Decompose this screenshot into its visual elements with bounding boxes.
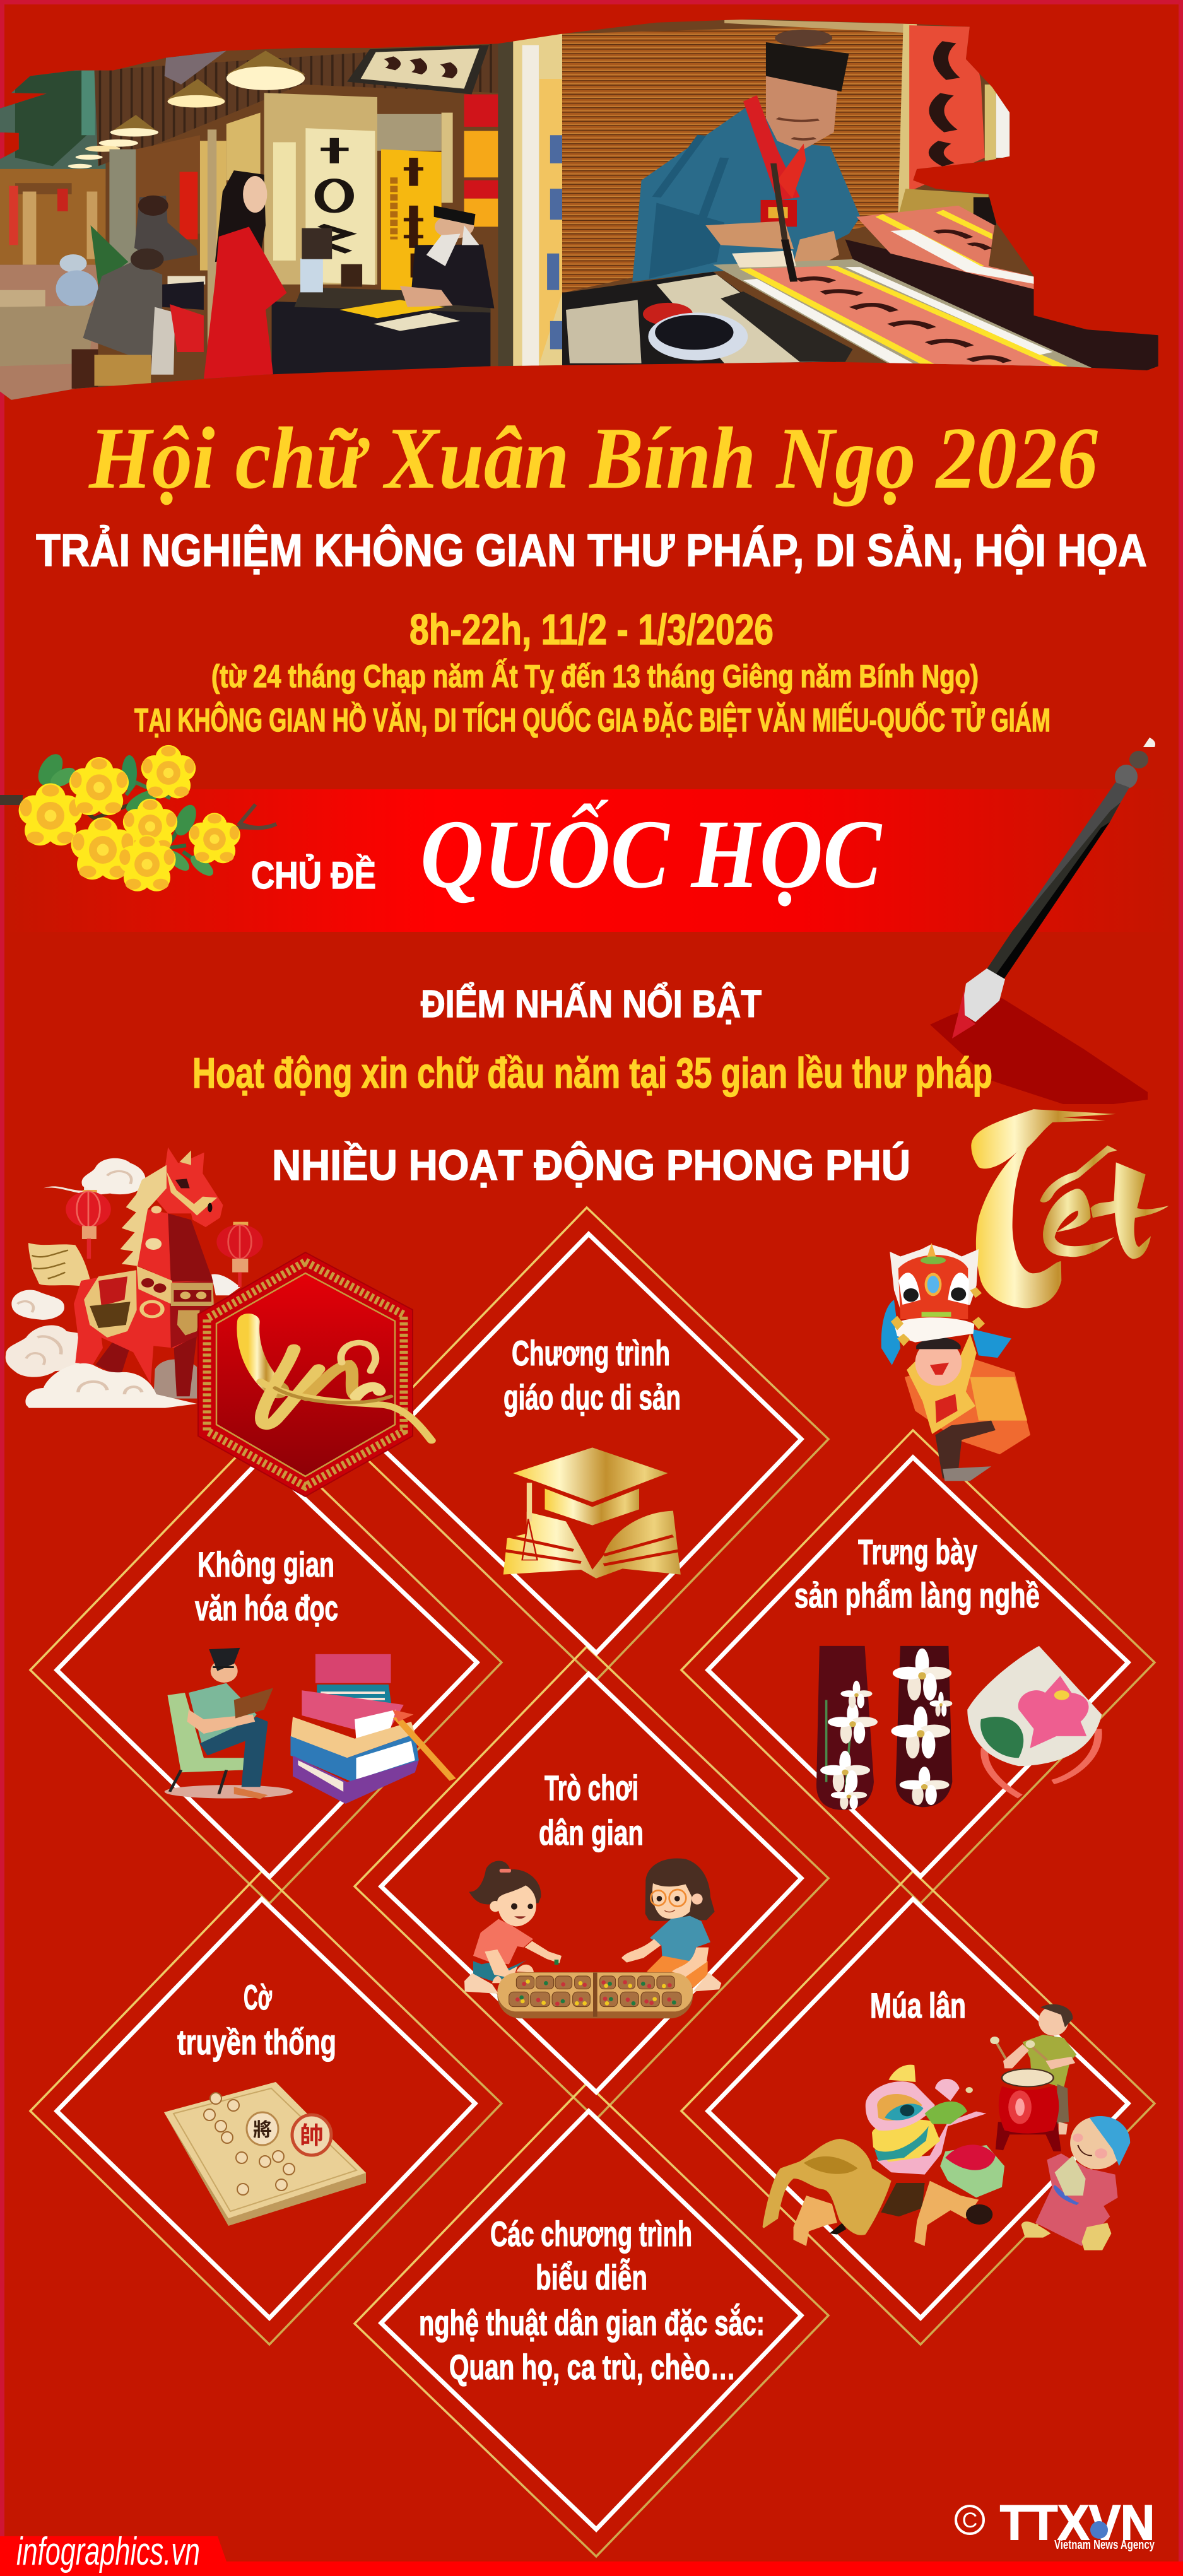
text: folk games: Trò chơi (544, 1768, 639, 1808)
lunar dates: (từ 24 tháng Chạp năm Ất Tỵ đến 13 tháng Giêng năm Bính Ngọ) (211, 659, 979, 694)
icon: xiangqi board (164, 2082, 366, 2226)
text: folk games: dân gian (539, 1813, 644, 1852)
text: folk art performances: Quan họ, ca trù, chèo… (449, 2347, 736, 2387)
copyright logo TTXVN: C (962, 2508, 977, 2532)
diamond frames (30, 1208, 1155, 2556)
icon: calligraphy brush (952, 738, 1155, 1038)
theme label: CHỦ ĐỀ (251, 854, 376, 897)
theme name: QUỐC HỌC (420, 799, 883, 909)
icon: apricot blossom branch (0, 745, 276, 891)
text: craft village products (794, 1532, 1040, 1615)
text: traditional chess: truyền thống (177, 2022, 336, 2062)
text: traditional chess: Cờ (244, 1977, 272, 2017)
activities heading: NHIỀU HOẠT ĐỘNG PHONG PHÚ (272, 1141, 910, 1189)
text: heritage education: giáo dục di sản (503, 1377, 681, 1417)
icon: reader and book stack (165, 1648, 453, 1804)
text: folk art performances: biểu diễn (536, 2257, 647, 2297)
icon: xiangqi board: 將 (253, 2120, 272, 2141)
badge: hexagon Xuân (198, 1252, 432, 1497)
text: reading culture space: văn hóa đọc (195, 1588, 338, 1628)
text: folk art performances: Các chương trình (490, 2214, 692, 2254)
text: folk games (539, 1768, 644, 1852)
highlights heading: ĐIỂM NHẤN NỔI BẬT (421, 982, 762, 1025)
icon: graduation cap on book (503, 1447, 681, 1579)
text: craft village products: Trưng bày (858, 1532, 977, 1572)
theme band (4, 789, 1179, 932)
text: craft village products: sản phẩm làng nghề (794, 1575, 1040, 1615)
icon: paper horse with lanterns and clouds (6, 1147, 263, 1408)
icon: children playing mancala (464, 1859, 721, 2018)
brush stroke shadow (930, 998, 1148, 1104)
icon: lion dance troupe (763, 2004, 1130, 2250)
lion body and legs (763, 2065, 1004, 2246)
text: lion dance: Múa lân (870, 1985, 966, 2025)
copyright logo TTXVN: TTXVN (1000, 2495, 1155, 2550)
icon: lion dance boy (881, 1243, 1030, 1481)
icon: xiangqi board: 帥 (300, 2123, 324, 2150)
text: reading culture space (195, 1544, 338, 1628)
text: folk art performances (419, 2214, 765, 2387)
website tag: infographics.vn (16, 2530, 200, 2573)
title: Hội chữ Xuân Bính Ngọ 2026 (88, 409, 1098, 507)
icon: Tết calligraphy (971, 1109, 1168, 1308)
footer bar (0, 2561, 1183, 2576)
text: reading culture space: Không gian (197, 1544, 334, 1584)
text: heritage education (503, 1333, 681, 1417)
text: folk art performances: nghệ thuật dân gian đặc sắc: (419, 2303, 765, 2343)
icon: lacquer vases and painted hat (816, 1646, 1102, 1810)
text: heritage education: Chương trình (512, 1333, 670, 1373)
hero photo: calligraphers (0, 19, 1158, 400)
text: traditional chess (177, 1977, 336, 2062)
date and time: 8h-22h, 11/2 - 1/3/2026 (409, 606, 774, 654)
